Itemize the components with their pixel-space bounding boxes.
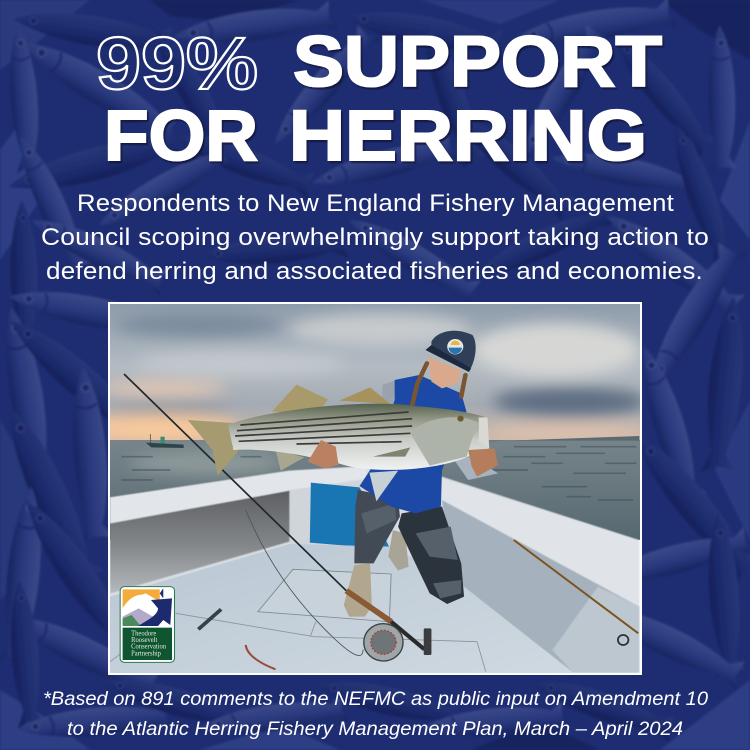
- intro text block: Respondents to New England Fishery Management: [77, 190, 674, 217]
- distant boat: [146, 434, 184, 448]
- title: [96, 22, 662, 176]
- footnote text block: to the Atlantic Herring Fishery Management Plan, March – April 2024: [67, 718, 683, 740]
- angler torso and vest: [360, 375, 498, 513]
- sky: [79, 304, 651, 444]
- title number: 99% outlined: 99%: [96, 22, 258, 105]
- footnote text block: [43, 688, 708, 740]
- intro text block: Council scoping overwhelmingly support taking action to: [41, 224, 709, 251]
- logo: Theodore Roosevelt Conservation Partnership: [120, 587, 174, 662]
- logo name panel: [123, 628, 172, 660]
- deck: [110, 544, 573, 673]
- striped bass: tail and fins: [188, 385, 390, 475]
- rod and reel: [124, 374, 638, 661]
- photo frame: [108, 302, 642, 675]
- angler head, braids and cap: [412, 331, 476, 405]
- angler hands: [308, 440, 498, 477]
- title word: FOR: FOR: [104, 97, 258, 176]
- boat hull and gunwales: [110, 466, 639, 673]
- intro text block: [41, 190, 709, 285]
- photo: angler holding striped bass on boat: [110, 304, 640, 673]
- sea: [110, 434, 640, 540]
- logo name panel: Conservation: [131, 642, 167, 651]
- angler legs and boots: [344, 490, 464, 617]
- blue panel: [310, 483, 390, 549]
- footnote text block: *Based on 891 comments to the NEFMC as public input on Amendment 10: [43, 688, 708, 710]
- logo illustration: [123, 588, 172, 627]
- logo name panel: Theodore: [131, 629, 156, 637]
- logo name panel: Partnership: [131, 649, 161, 657]
- striped bass: body: [228, 404, 489, 501]
- title word: HERRING: HERRING: [289, 97, 647, 176]
- intro text block: defend herring and associated fisheries and economies.: [46, 258, 703, 285]
- logo name panel: Roosevelt: [131, 636, 157, 644]
- title word: SUPPORT: SUPPORT: [293, 23, 662, 102]
